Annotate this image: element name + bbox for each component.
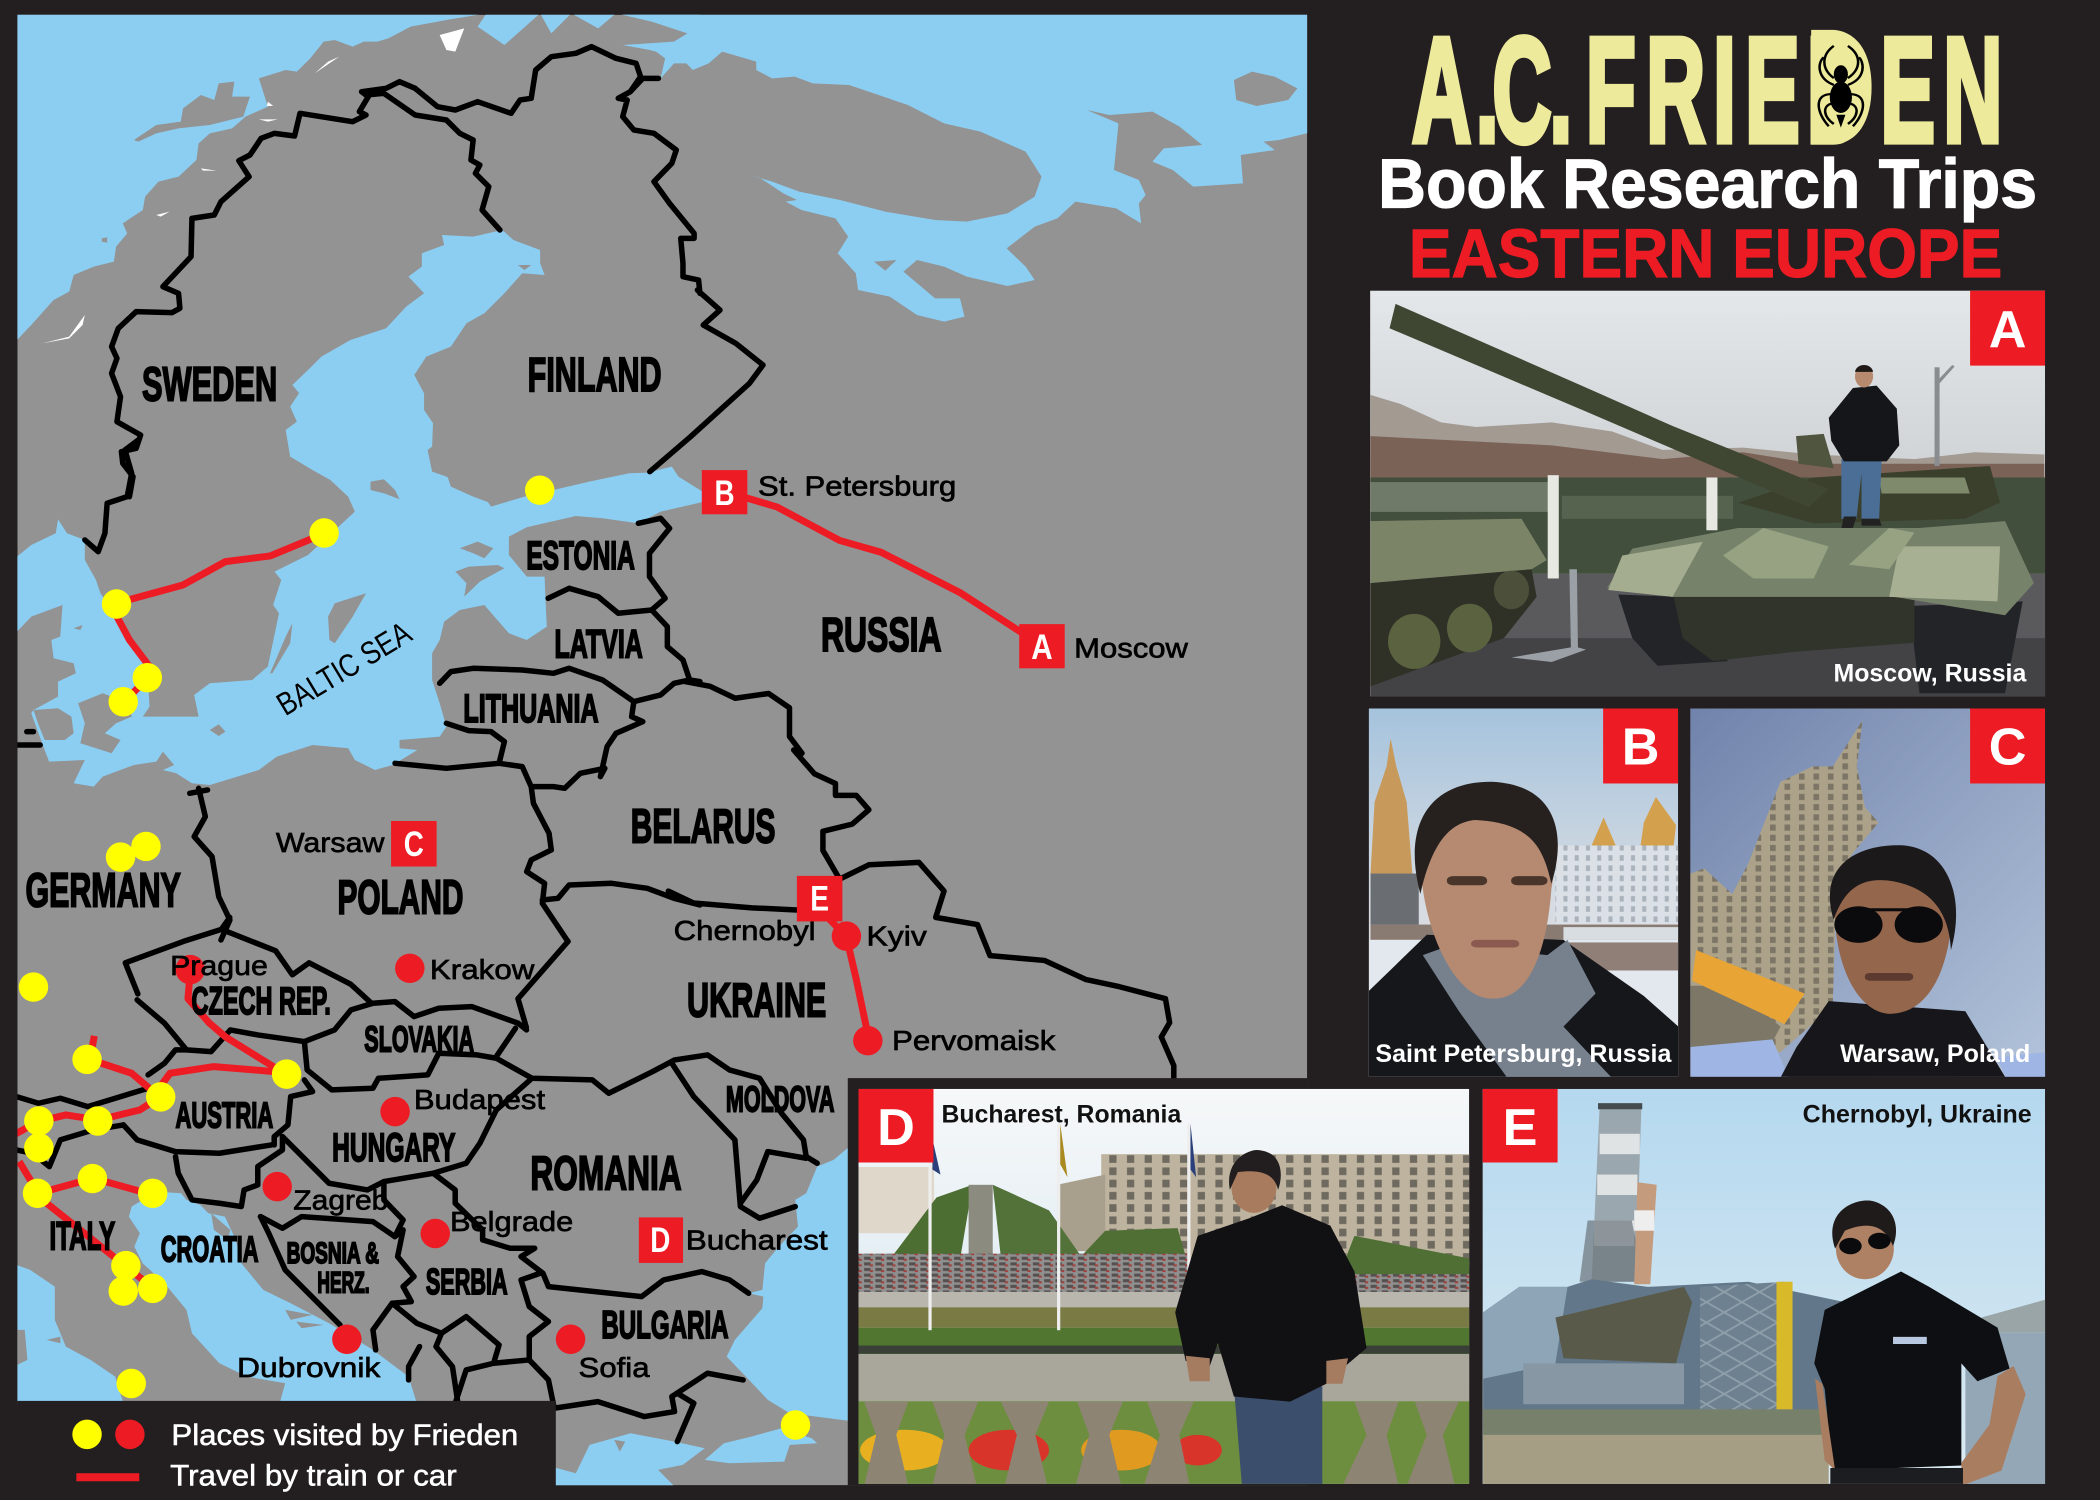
country labels [25,348,942,1347]
photo A: Moscow tank [1370,291,2045,698]
city labels: Kyiv [867,921,927,952]
country labels: AUSTRIA [175,1095,273,1136]
city labels: Pervomaisk [892,1025,1056,1056]
country labels: HUNGARY [332,1125,455,1170]
map marker C: C [404,825,424,864]
country labels: UKRAINE [687,974,826,1028]
caption: Moscow, Russia [1833,661,2027,688]
city labels: Chernobyl [674,915,816,946]
water: Norwegian Sea [13,10,700,340]
country labels: SLOVAKIA [364,1018,474,1059]
map marker E [797,876,842,921]
water: Barents and White Sea [600,10,1313,322]
city labels: Budapest [414,1084,545,1115]
snow specks on Norwegian coast [42,28,464,343]
city labels [170,471,1189,1383]
marker B: B [1622,719,1659,777]
frame behind photos D and E [848,1078,1307,1485]
land mass [17,15,1307,1485]
caption: Warsaw, Poland [1840,1041,2030,1068]
photo B: Saint Petersburg selfie [1369,708,1680,1078]
country labels: BULGARIA [601,1304,729,1347]
map marker B: B [715,474,735,513]
legend route line [76,1473,139,1481]
tank scene [1370,304,2045,698]
region heading: EASTERN EUROPE [1409,216,2002,292]
yellow dots: places visited [19,475,810,1440]
city labels: Bucharest [686,1225,828,1256]
title block [1378,7,2037,292]
water: Baltic Sea [13,230,704,787]
marker A [1970,291,2045,366]
country borders: Baltic states and Poland [18,440,700,940]
author name: FRIEDEN [1586,7,2002,174]
map marker D: D [650,1221,670,1260]
city labels: Moscow [1074,633,1189,664]
selfie scene [1690,720,2046,1078]
country labels: HERZ. [317,1266,370,1299]
caption: Saint Petersburg, Russia [1375,1041,1672,1068]
country labels: BOSNIA & [287,1237,379,1270]
country borders: Ukraine east [125,750,1174,1080]
border: Finland and Russia [650,290,763,472]
country labels: GERMANY [25,864,181,918]
red dots: places visited [175,921,883,1354]
country labels: SERBIA [426,1261,508,1302]
city labels: Warsaw [276,827,385,858]
marker B [1603,708,1678,783]
marker A: A [1989,301,2026,359]
country labels: LATVIA [554,622,643,667]
city labels: Sofia [579,1352,650,1383]
map of northern and eastern Europe [13,10,1313,1487]
city labels: Zagreb [293,1184,388,1215]
country labels: ROMANIA [530,1146,682,1200]
map marker D [639,1217,683,1263]
photo D: Bucharest [858,1089,1471,1488]
island in the Barents Sea [874,72,1297,271]
marker E: E [1503,1099,1538,1157]
map marker C [391,821,437,867]
water: Adriatic, Tyrrhenian, Black Sea, Aegean, Marmara [14,1147,856,1487]
subtitle: Book Research Trips [1378,145,2037,223]
city labels: Belgrade [450,1206,573,1237]
map marker B [702,470,747,514]
legend red dot [115,1420,145,1449]
country borders: Russia, Belarus, Ukraine [685,682,802,753]
caption: Chernobyl, Ukraine [1803,1101,2032,1128]
photo C: Warsaw selfie [1690,708,2046,1078]
coastal islands of Norway [102,82,250,243]
country labels: LITHUANIA [463,686,599,731]
reactor scene [1483,1103,2046,1488]
country labels: MOLDOVA [726,1079,834,1120]
city labels: St. Petersburg [758,471,956,502]
legend yellow dot [72,1420,102,1449]
country labels: CROATIA [161,1229,258,1270]
city labels: Krakow [430,954,535,985]
city labels: Prague [170,950,268,981]
legend [17,1401,556,1500]
red travel routes [14,492,1042,1288]
islands of the Baltic [33,265,531,753]
sea label: BALTIC SEA [270,614,418,723]
map marker E: E [810,880,829,919]
country borders: Scandinavia [112,47,700,497]
icon: spider in the letter D [1811,30,1872,145]
marker D: D [877,1099,915,1157]
southern small islands [14,1213,675,1477]
balcony scene [858,1124,1471,1488]
country labels: POLAND [338,870,463,924]
country labels: FINLAND [528,348,662,402]
country labels: ESTONIA [526,533,635,578]
marker C [1970,708,2045,783]
legend text: travel: Travel by train or car [170,1459,457,1492]
country borders: central and Balkans [16,1000,817,1442]
map marker A: A [1031,628,1053,667]
marker C: C [1989,719,2026,777]
marker E [1483,1089,1558,1162]
marker D [858,1089,933,1162]
selfie scene [1369,738,1680,1078]
legend text: places: Places visited by Frieden [171,1419,518,1452]
country labels: CZECH REP. [192,980,331,1023]
author name: A.C. [1412,7,1572,174]
city labels: Dubrovnik [237,1352,381,1383]
map marker A [1019,624,1065,668]
country labels: SWEDEN [142,357,277,411]
photo E: Chernobyl [1483,1089,2046,1488]
caption: Bucharest, Romania [942,1101,1181,1128]
country labels: ITALY [50,1214,115,1259]
country labels: RUSSIA [821,608,942,662]
country labels: BELARUS [631,799,775,853]
